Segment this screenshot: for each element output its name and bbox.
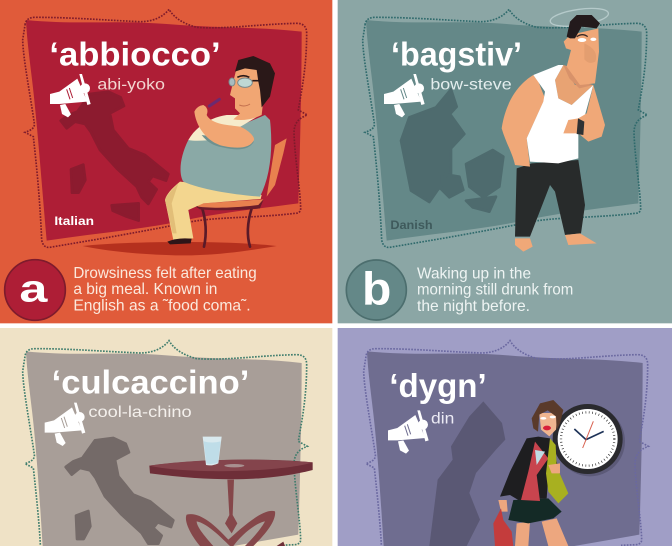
panel: bagstiv	[338, 0, 672, 323]
description: Drowsiness felt after eating	[73, 265, 257, 282]
backdrop shape	[26, 351, 302, 546]
pronunciation: din	[431, 411, 454, 428]
panel: abbiocco	[0, 0, 332, 323]
icon: wall clock	[553, 404, 625, 476]
description: morning still drunk from	[417, 281, 573, 298]
panel: dygn	[338, 328, 672, 546]
pronunciation: bow-steve	[430, 76, 512, 93]
dotted frame	[364, 341, 648, 545]
map: Denmark	[401, 89, 503, 212]
map: Italy	[66, 438, 173, 544]
pronunciation: cool-la-chino	[88, 404, 192, 421]
language label: Danish	[390, 218, 433, 232]
dotted frame	[23, 341, 307, 545]
map: Sweden	[429, 401, 505, 546]
icon: megaphone	[384, 74, 425, 117]
dotted frame	[363, 9, 647, 247]
language label: Italian	[54, 214, 94, 228]
badge: b	[346, 260, 406, 320]
backdrop shape	[367, 351, 643, 546]
floor shadow	[83, 242, 277, 255]
description: English as a ˜food coma˜.	[73, 297, 251, 314]
backdrop shape	[26, 20, 302, 241]
badge: a: a	[19, 267, 48, 310]
badge: b: b	[362, 263, 391, 315]
description: the night before.	[417, 298, 530, 315]
heading: dygn: ‘dygn’	[389, 368, 487, 405]
icon: megaphone	[388, 410, 429, 454]
figure: man on a chair	[165, 56, 287, 247]
icon: megaphone	[45, 403, 85, 446]
backdrop shape	[366, 20, 642, 241]
heading: bagstiv: ‘bagstiv’	[391, 37, 522, 74]
heading: abbiocco: ‘abbiocco’	[49, 37, 221, 74]
pronunciation: abi-yoko	[97, 76, 165, 93]
panel: culcaccino	[0, 328, 332, 546]
description: a big meal. Known in	[73, 281, 217, 298]
map: Italy	[61, 92, 168, 221]
illustration: cafe table and glass	[149, 437, 313, 546]
badge: a	[5, 260, 65, 320]
description: Waking up in the	[417, 265, 531, 282]
figure: woman in a hurry	[493, 400, 568, 546]
figure: man with watch	[502, 5, 609, 252]
icon: megaphone	[50, 74, 91, 117]
heading: culcaccino: ‘culcaccino’	[52, 365, 249, 402]
dotted frame	[23, 9, 307, 247]
description	[417, 265, 573, 315]
description	[73, 265, 257, 314]
